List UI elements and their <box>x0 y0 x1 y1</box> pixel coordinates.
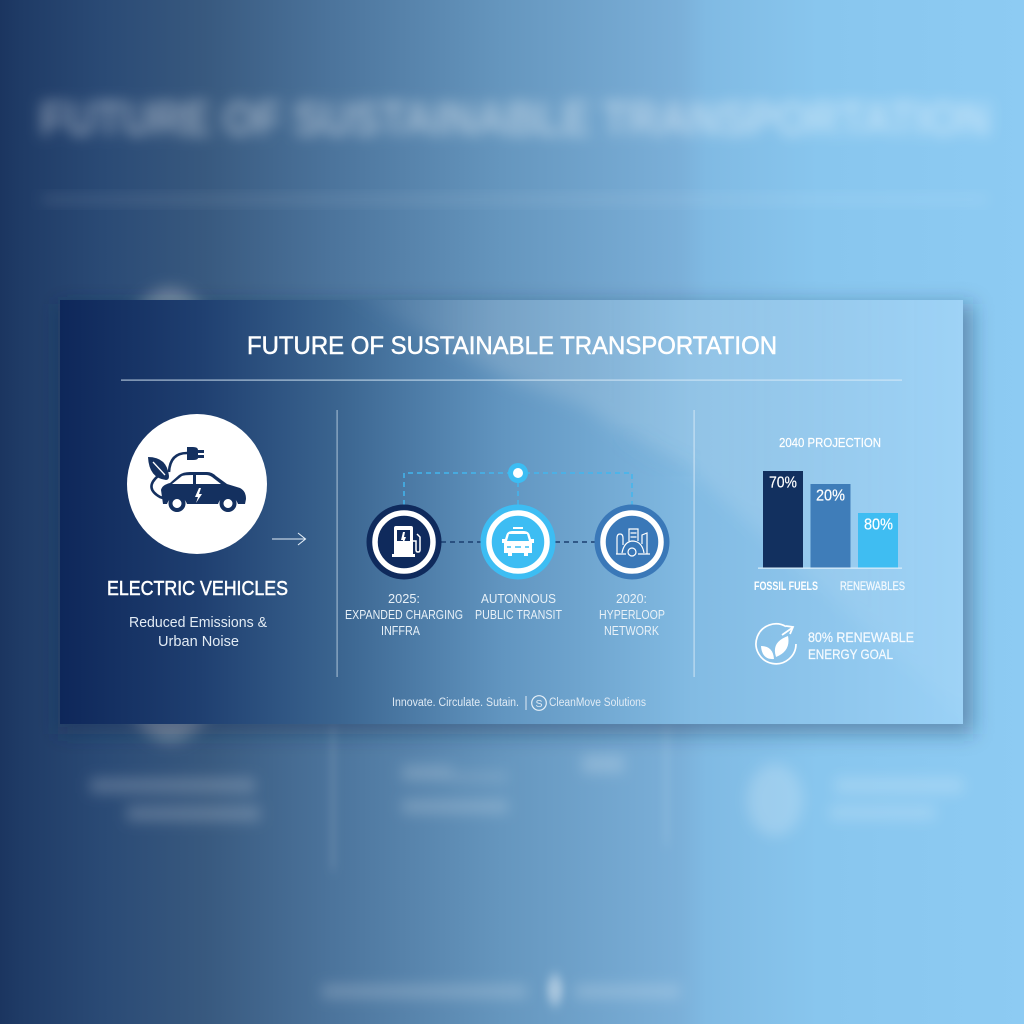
label: autonomous transit: AUTONNOUS <box>481 591 556 606</box>
label: 2020 hyperloop: NETWORK <box>604 623 659 638</box>
label: autonomous transit: PUBLIC TRANSIT <box>475 607 562 622</box>
text: benefit <box>129 615 267 650</box>
footer: Innovate. Circulate. Sutain. <box>392 697 519 709</box>
text: benefit: Urban Noise <box>158 634 239 650</box>
blurred circle <box>90 289 250 741</box>
leaf vein <box>153 462 165 475</box>
blurred rule <box>42 196 987 203</box>
title rule <box>121 380 902 381</box>
front wheel <box>169 495 186 512</box>
connectors <box>404 473 632 542</box>
timeline node <box>508 463 528 483</box>
bolt <box>195 488 202 503</box>
footer: CleanMove Solutions <box>549 697 646 709</box>
car body <box>161 472 246 504</box>
card shadow <box>58 304 973 734</box>
label: 2025 charging <box>345 591 463 638</box>
icon: renewable leaf <box>756 624 796 664</box>
icon: CleanMove logo: S <box>536 698 543 710</box>
bar chart: 80% <box>864 516 893 534</box>
blurred dividers <box>330 724 669 870</box>
icon: electric car in circle <box>127 414 267 554</box>
divider left <box>336 410 338 677</box>
text: benefit: Reduced Emissions & <box>129 615 267 631</box>
plug <box>187 447 204 460</box>
label: autonomous transit <box>475 591 562 622</box>
icon: charging station <box>366 504 442 580</box>
label: 2020 hyperloop <box>599 591 665 638</box>
leaf <box>148 457 169 480</box>
label: 2025 charging: 2025: <box>388 591 420 606</box>
icon: autonomous shuttle <box>480 504 556 580</box>
blurred goal circle <box>747 764 803 836</box>
divider right <box>694 410 695 677</box>
icon: CleanMove logo <box>532 696 546 710</box>
car windows <box>172 475 221 484</box>
cable and stem <box>151 453 187 499</box>
blurred lower text <box>90 755 963 998</box>
axis label: renewables: RENEWABLES <box>840 581 905 593</box>
heading: 2040 projection: 2040 PROJECTION <box>779 435 881 450</box>
text: renewable goal <box>808 629 914 662</box>
footer <box>392 696 646 710</box>
card light sheen <box>382 300 844 584</box>
label: 2020 hyperloop: 2020: <box>616 591 647 606</box>
heading: electric vehicles: ELECTRIC VEHICLES <box>107 578 288 600</box>
text: renewable goal: ENERGY GOAL <box>808 646 893 662</box>
bar chart <box>754 471 905 593</box>
panel: electric vehicles <box>107 414 306 650</box>
icon: hyperloop network <box>594 504 670 580</box>
panel: 2040 projection <box>754 435 914 664</box>
label: 2020 hyperloop: HYPERLOOP <box>599 607 665 622</box>
bar chart: 70% <box>769 474 797 492</box>
text: renewable goal: 80% RENEWABLE <box>808 629 914 645</box>
blurred footer logo <box>547 975 563 1005</box>
panel: main card <box>60 280 985 735</box>
bar chart: 20% <box>816 488 845 504</box>
title: FUTURE OF SUSTAINABLE TRANSPORTATION <box>247 332 777 360</box>
rear wheel <box>220 495 237 512</box>
arrow <box>272 533 306 545</box>
axis label: fossil fuels: FOSSIL FUELS <box>754 581 818 593</box>
label: 2025 charging: INFFRA <box>381 623 420 638</box>
panel: roadmap timeline <box>345 463 670 638</box>
label: 2025 charging: EXPANDED CHARGING <box>345 607 463 622</box>
